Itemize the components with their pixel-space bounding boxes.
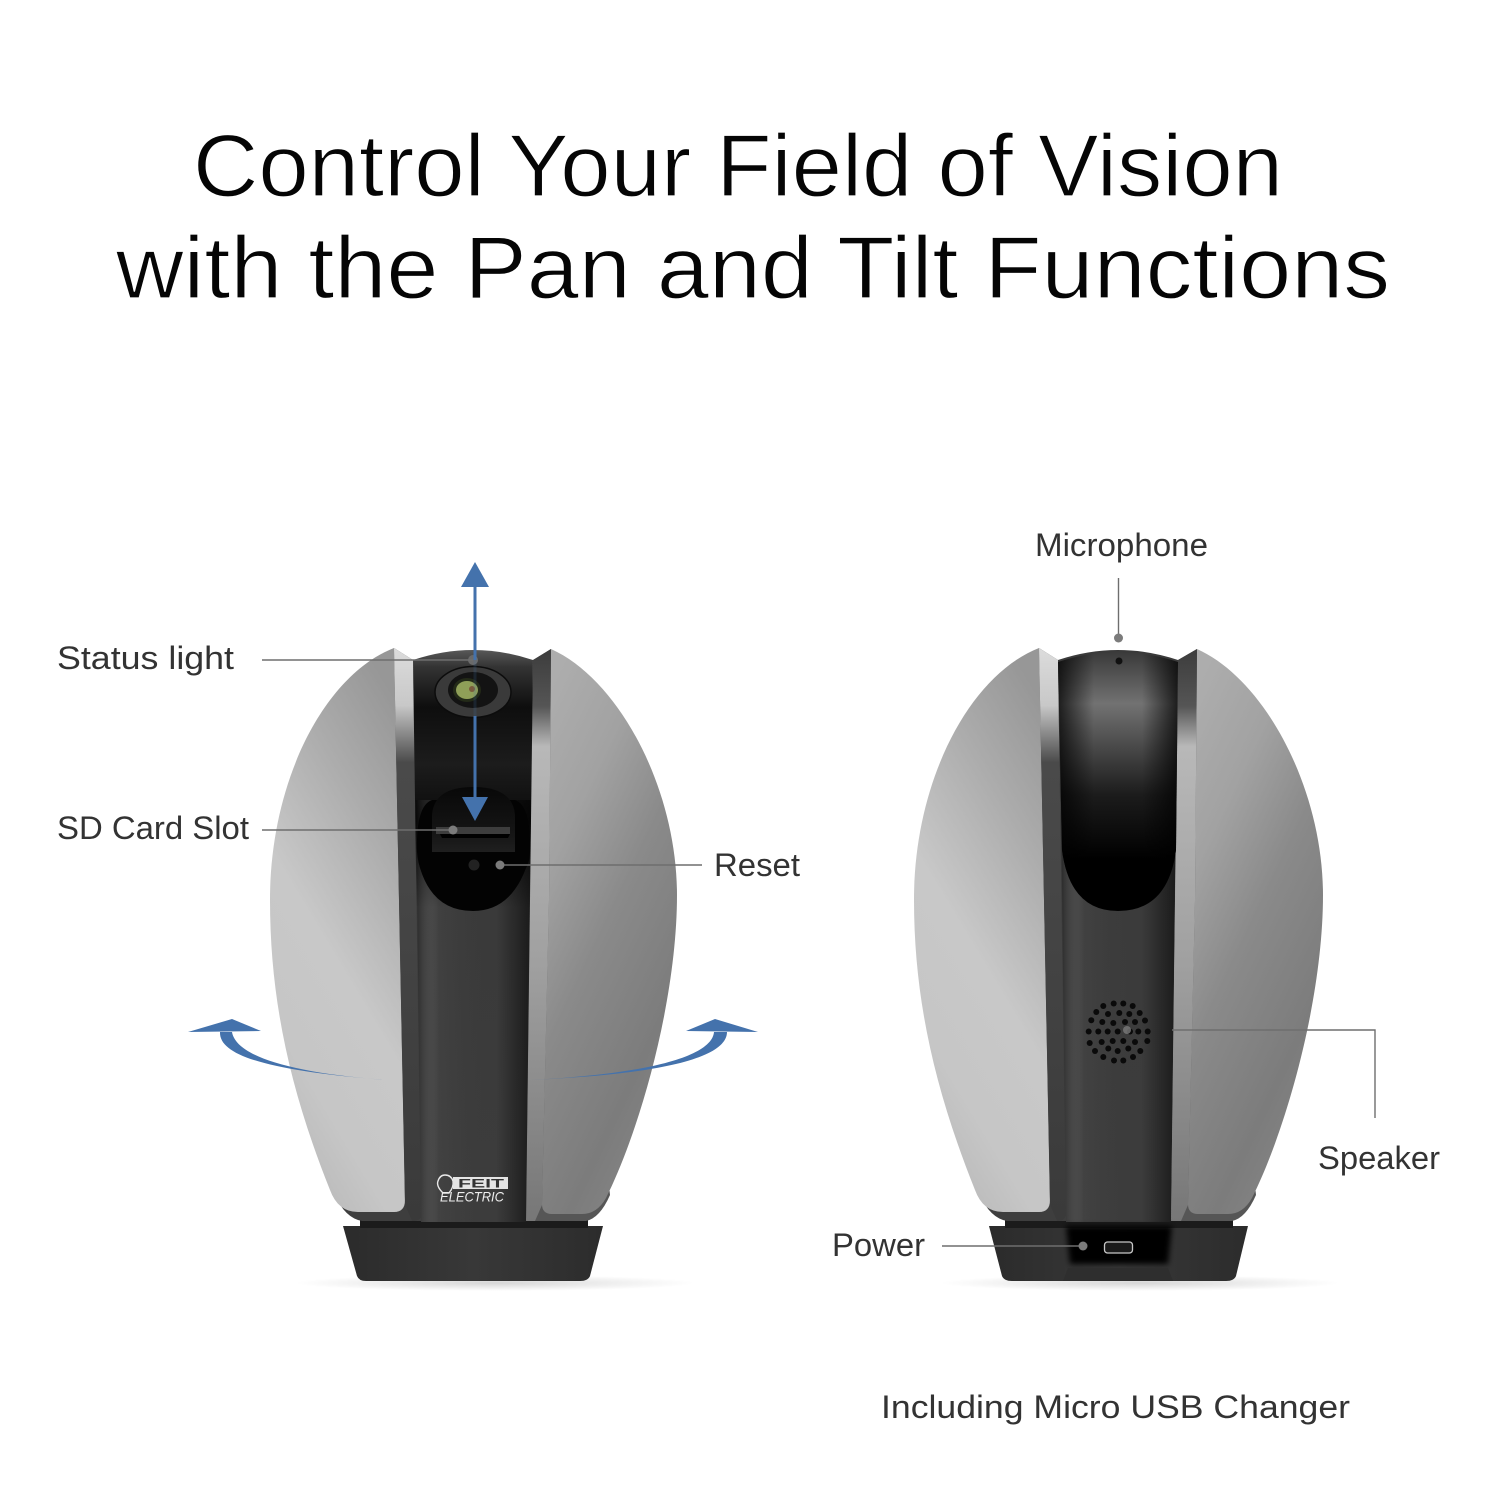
slot shadow [440, 834, 510, 838]
callout: status light: Status light [57, 640, 234, 676]
right rear shell underside [1172, 649, 1256, 1221]
rear top cap [1058, 652, 1178, 911]
rear left strip [1039, 648, 1066, 1221]
camera base shadow [295, 1275, 695, 1291]
right shell [542, 649, 677, 1214]
title [115, 116, 1390, 317]
microphone hole [1116, 658, 1122, 664]
left shell [270, 648, 405, 1212]
vertical tilt arrow [461, 562, 489, 821]
title: with the Pan and Tilt Functions [115, 218, 1390, 317]
title: Control Your Field of Vision [193, 116, 1283, 215]
callout: SD card slot: SD Card Slot [57, 810, 249, 846]
right shell inner strip [525, 649, 551, 1221]
callout: SD card slot [57, 810, 458, 846]
rear cap side shading [1058, 652, 1178, 911]
left pan arrow [188, 1019, 400, 1081]
lens housing [435, 666, 511, 718]
rear right strip [1171, 649, 1197, 1221]
callout: microphone: Microphone [1035, 527, 1208, 563]
centre column [413, 650, 533, 1222]
Feit Electric logo [438, 1175, 508, 1204]
callout: power [832, 1227, 1088, 1263]
rear camera [914, 648, 1340, 1291]
callout: speaker: Speaker [1318, 1140, 1440, 1176]
rear shell undersides [980, 648, 1067, 1221]
camera base [343, 1226, 603, 1281]
right pan arrow [530, 1019, 758, 1080]
port recess [1066, 1226, 1172, 1264]
speaker grille [1086, 1000, 1151, 1064]
rear column [1058, 650, 1178, 1222]
SD card slot [436, 827, 510, 834]
callout: microphone [1035, 527, 1208, 642]
callout: speaker [1123, 1026, 1440, 1176]
callout: power: Power [832, 1227, 925, 1263]
rear right shell [1188, 649, 1323, 1214]
front camera [270, 648, 695, 1291]
status light [468, 655, 478, 665]
callout: reset [496, 847, 800, 883]
reset holes [468, 860, 480, 870]
micro USB port [1104, 1242, 1132, 1253]
rear base neck [1005, 1219, 1233, 1228]
left shell underside [335, 648, 422, 1221]
lens [448, 672, 498, 708]
base neck [360, 1219, 588, 1228]
left shell inner strip [394, 648, 422, 1221]
rear base shadow [940, 1275, 1340, 1291]
Feit Electric logo: ELECTRIC [440, 1188, 505, 1204]
callout: reset: Reset [714, 847, 800, 883]
caption: Including Micro USB Changer [881, 1389, 1350, 1425]
rear base [989, 1226, 1248, 1281]
column side shading [416, 800, 531, 1222]
right shell underside [525, 649, 610, 1221]
port lip [1063, 1268, 1173, 1281]
Feit Electric logo: FEIT [458, 1176, 505, 1190]
SD card bay [432, 787, 515, 852]
recess [417, 800, 530, 911]
rear left shell [914, 648, 1050, 1212]
rear column shading [1061, 800, 1176, 1222]
